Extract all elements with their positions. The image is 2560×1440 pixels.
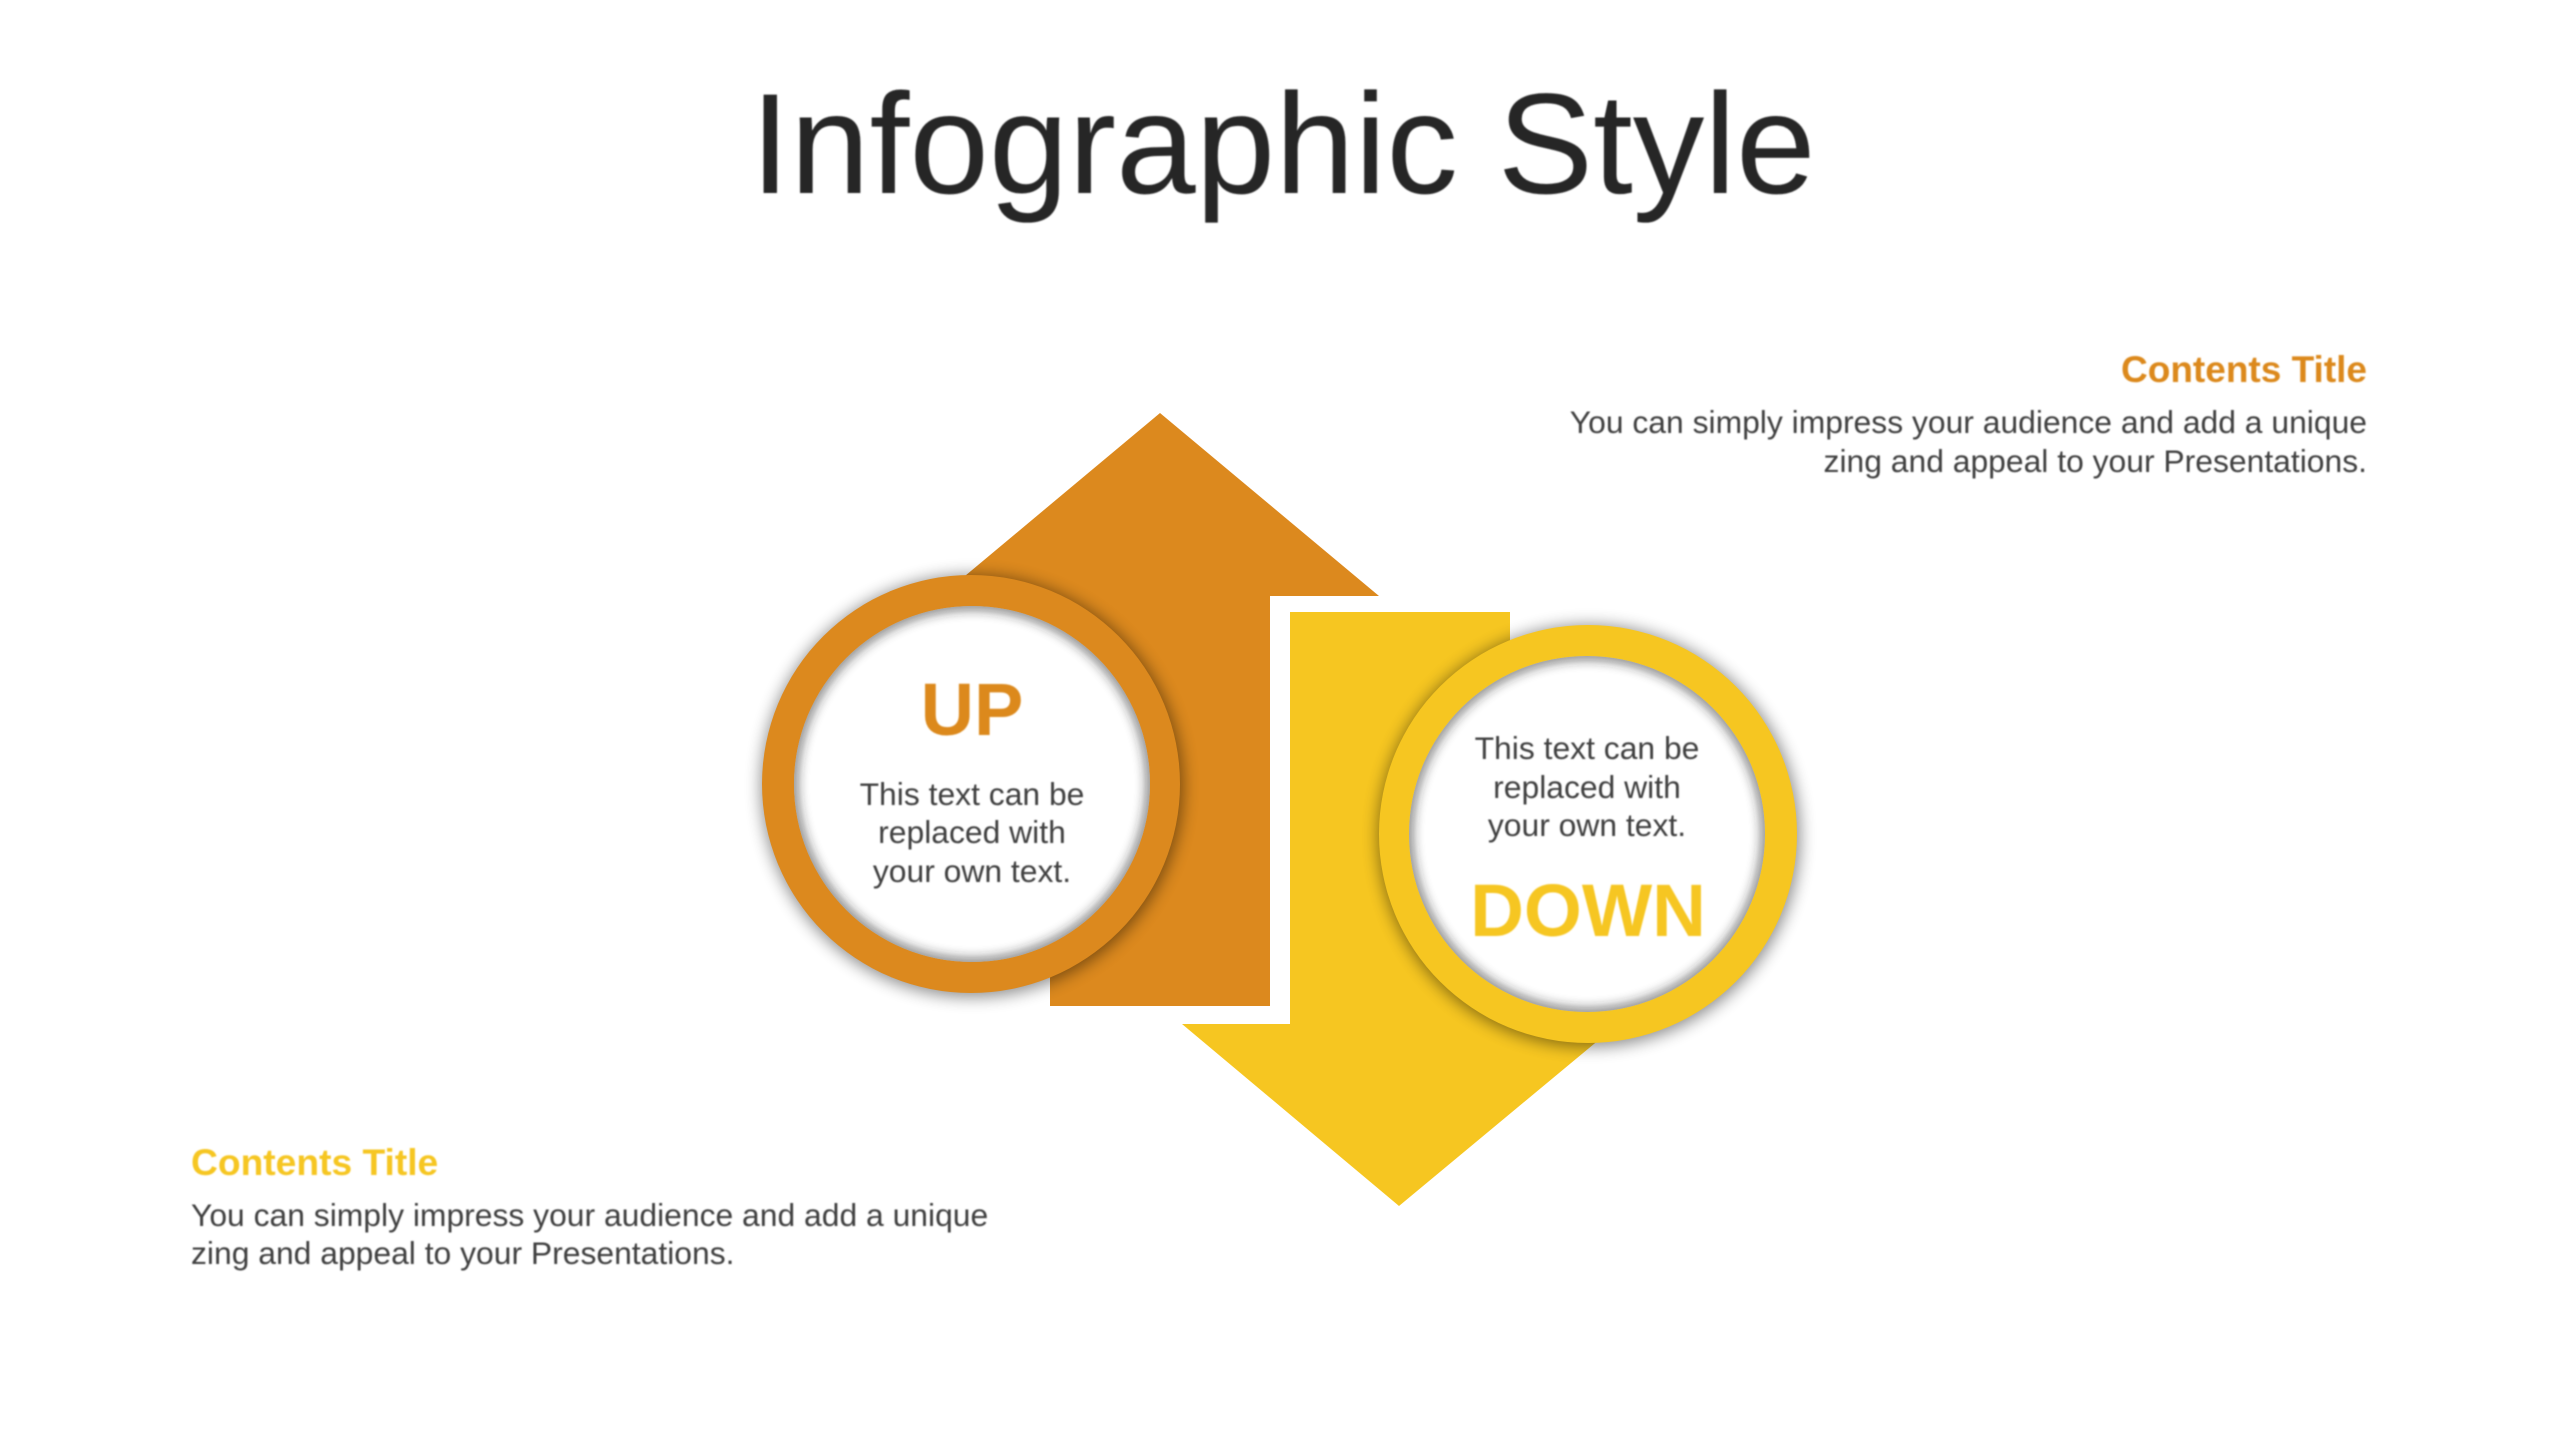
text block: bottom left contents: zing and appeal to your Presentations. [191, 1235, 734, 1271]
text: up description: This text can be [860, 776, 1084, 812]
text block: bottom left contents: You can simply impress your audience and add a unique [191, 1197, 988, 1233]
text: down description: your own text. [1488, 807, 1686, 843]
inner disc: up [792, 604, 1152, 964]
ring: down [1379, 625, 1797, 1043]
text block: top right contents: zing and appeal to your Presentations. [1824, 443, 2367, 479]
label: DOWN: DOWN [1470, 869, 1706, 952]
circle: up [761, 575, 1183, 997]
ring: up [762, 575, 1180, 993]
text: up description [860, 776, 1084, 889]
text: down description [1475, 730, 1699, 843]
text: up description: replaced with [878, 814, 1066, 850]
arrow: up [941, 413, 1379, 1006]
circle: down [1378, 625, 1800, 1047]
text block: top right contents: You can simply impress your audience and add a unique [1570, 404, 2367, 440]
text block: top right contents: Contents Title [2121, 349, 2367, 390]
title: Infographic Style [750, 65, 1816, 224]
inner disc: down [1407, 654, 1767, 1014]
text block: bottom left contents [191, 1141, 988, 1271]
arrow: down [1182, 612, 1618, 1206]
text: down description: replaced with [1493, 769, 1681, 805]
text: up description: your own text. [873, 853, 1071, 889]
text block: top right contents [1570, 349, 2367, 479]
text: down description: This text can be [1475, 730, 1699, 766]
text block: bottom left contents: Contents Title [191, 1141, 438, 1183]
label: UP: UP [921, 668, 1023, 751]
